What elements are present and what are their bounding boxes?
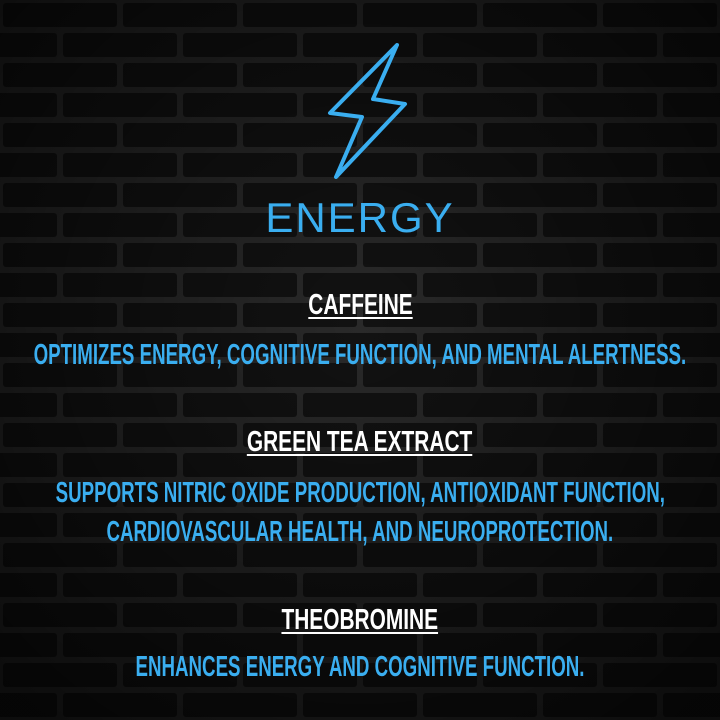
text: caffeine: OPTIMIZES ENERGY, COGNITIVE FUNCTION, AND MENTAL ALERTNESS. [34, 339, 686, 371]
text: green tea extract: SUPPORTS NITRIC OXIDE PRODUCTION, ANTIOXIDANT FUNCTION, [55, 477, 665, 509]
heading: green tea extract: GREEN TEA EXTRACT [247, 426, 473, 458]
text: theobromine: ENHANCES ENERGY AND COGNITIVE FUNCTION. [136, 651, 584, 683]
title: ENERGY [265, 194, 455, 241]
text: green tea extract line 2: CARDIOVASCULAR HEALTH, AND NEUROPROTECTION. [107, 516, 613, 548]
heading: theobromine: THEOBROMINE [282, 604, 438, 636]
heading: caffeine: CAFFEINE [308, 289, 412, 321]
icon: lightning bolt [328, 43, 408, 179]
